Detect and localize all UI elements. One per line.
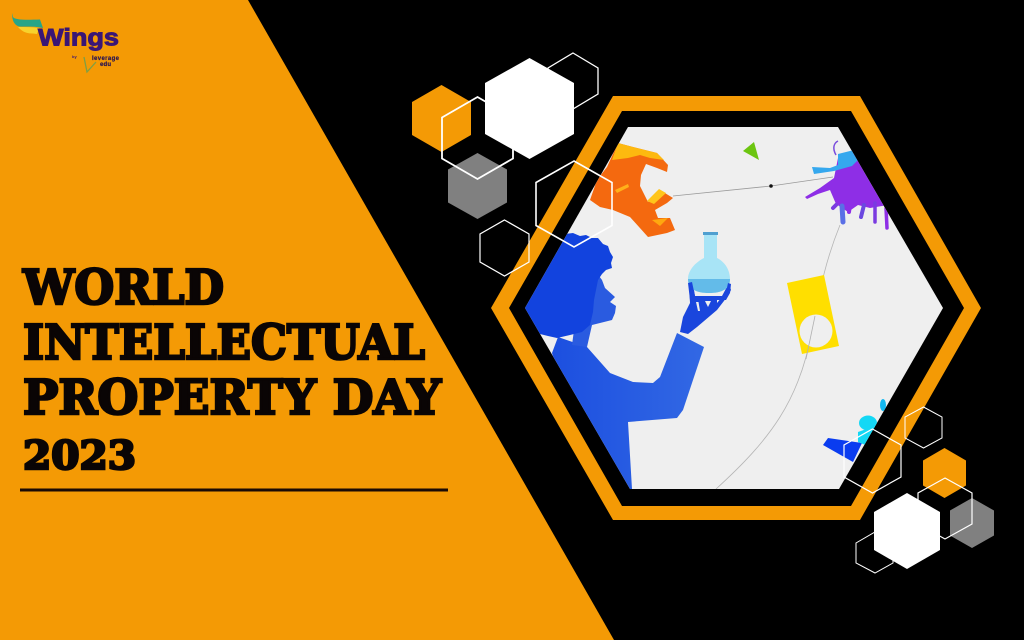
logo swoosh teal bbox=[12, 13, 43, 28]
logo tick bbox=[84, 57, 96, 72]
panel background bbox=[525, 127, 943, 489]
lower outline hexagon bbox=[856, 532, 893, 573]
title line: 2023: 2023 bbox=[23, 433, 136, 479]
outline hexagon on frame bbox=[844, 429, 901, 493]
white hexagon bbox=[874, 493, 940, 569]
logo edu: edu bbox=[100, 62, 111, 68]
hexagon cluster bottom right bbox=[844, 407, 994, 573]
hexagon frame orange bbox=[491, 96, 981, 520]
logo swoosh yellow bbox=[18, 27, 39, 34]
title line: WORLD: WORLD bbox=[22, 260, 224, 316]
logo leverage: leverage bbox=[92, 56, 120, 62]
flask bbox=[688, 232, 730, 293]
orange hexagon bbox=[923, 448, 966, 498]
hand fingers over flask bbox=[688, 282, 731, 300]
logo: Wings by Leverage Edu bbox=[12, 13, 120, 72]
connector dot bbox=[769, 184, 773, 188]
gray hexagon bbox=[448, 153, 507, 219]
hexagon cluster top left bbox=[412, 53, 612, 276]
hexagon photo panel bbox=[525, 127, 943, 489]
large outline hexagon bbox=[536, 161, 612, 247]
blue and cyan figure bbox=[823, 399, 886, 462]
title underline bbox=[20, 488, 448, 492]
title bbox=[22, 260, 442, 479]
white hexagon bbox=[485, 58, 574, 159]
connector curve bbox=[716, 225, 840, 489]
orange astronaut figure bbox=[590, 143, 675, 237]
orange hexagon bbox=[412, 85, 471, 152]
coat bbox=[552, 333, 704, 489]
hand bbox=[680, 283, 731, 334]
logo by: by bbox=[72, 54, 77, 59]
connector line top bbox=[673, 177, 833, 196]
title line: PROPERTY DAY: PROPERTY DAY bbox=[23, 370, 442, 426]
title line: INTELLECTUAL: INTELLECTUAL bbox=[23, 315, 425, 371]
purple dancing figure bbox=[805, 141, 888, 228]
finger gaps bbox=[696, 300, 720, 311]
gray hexagon bbox=[950, 498, 994, 548]
orange diagonal panel bbox=[0, 0, 614, 640]
hair bbox=[520, 233, 613, 338]
outline hexagon top right bbox=[548, 53, 598, 109]
green triangle bbox=[743, 142, 759, 160]
outline hexagon bbox=[918, 478, 972, 539]
small outline hexagon bbox=[905, 407, 942, 448]
small outline hexagon bbox=[480, 220, 529, 276]
face and neck bbox=[572, 272, 616, 347]
woman scientist bbox=[520, 232, 731, 489]
outline hexagon bbox=[442, 97, 513, 179]
yellow rectangle with circle bbox=[787, 275, 839, 359]
logo wordmark: Wings bbox=[38, 24, 119, 52]
